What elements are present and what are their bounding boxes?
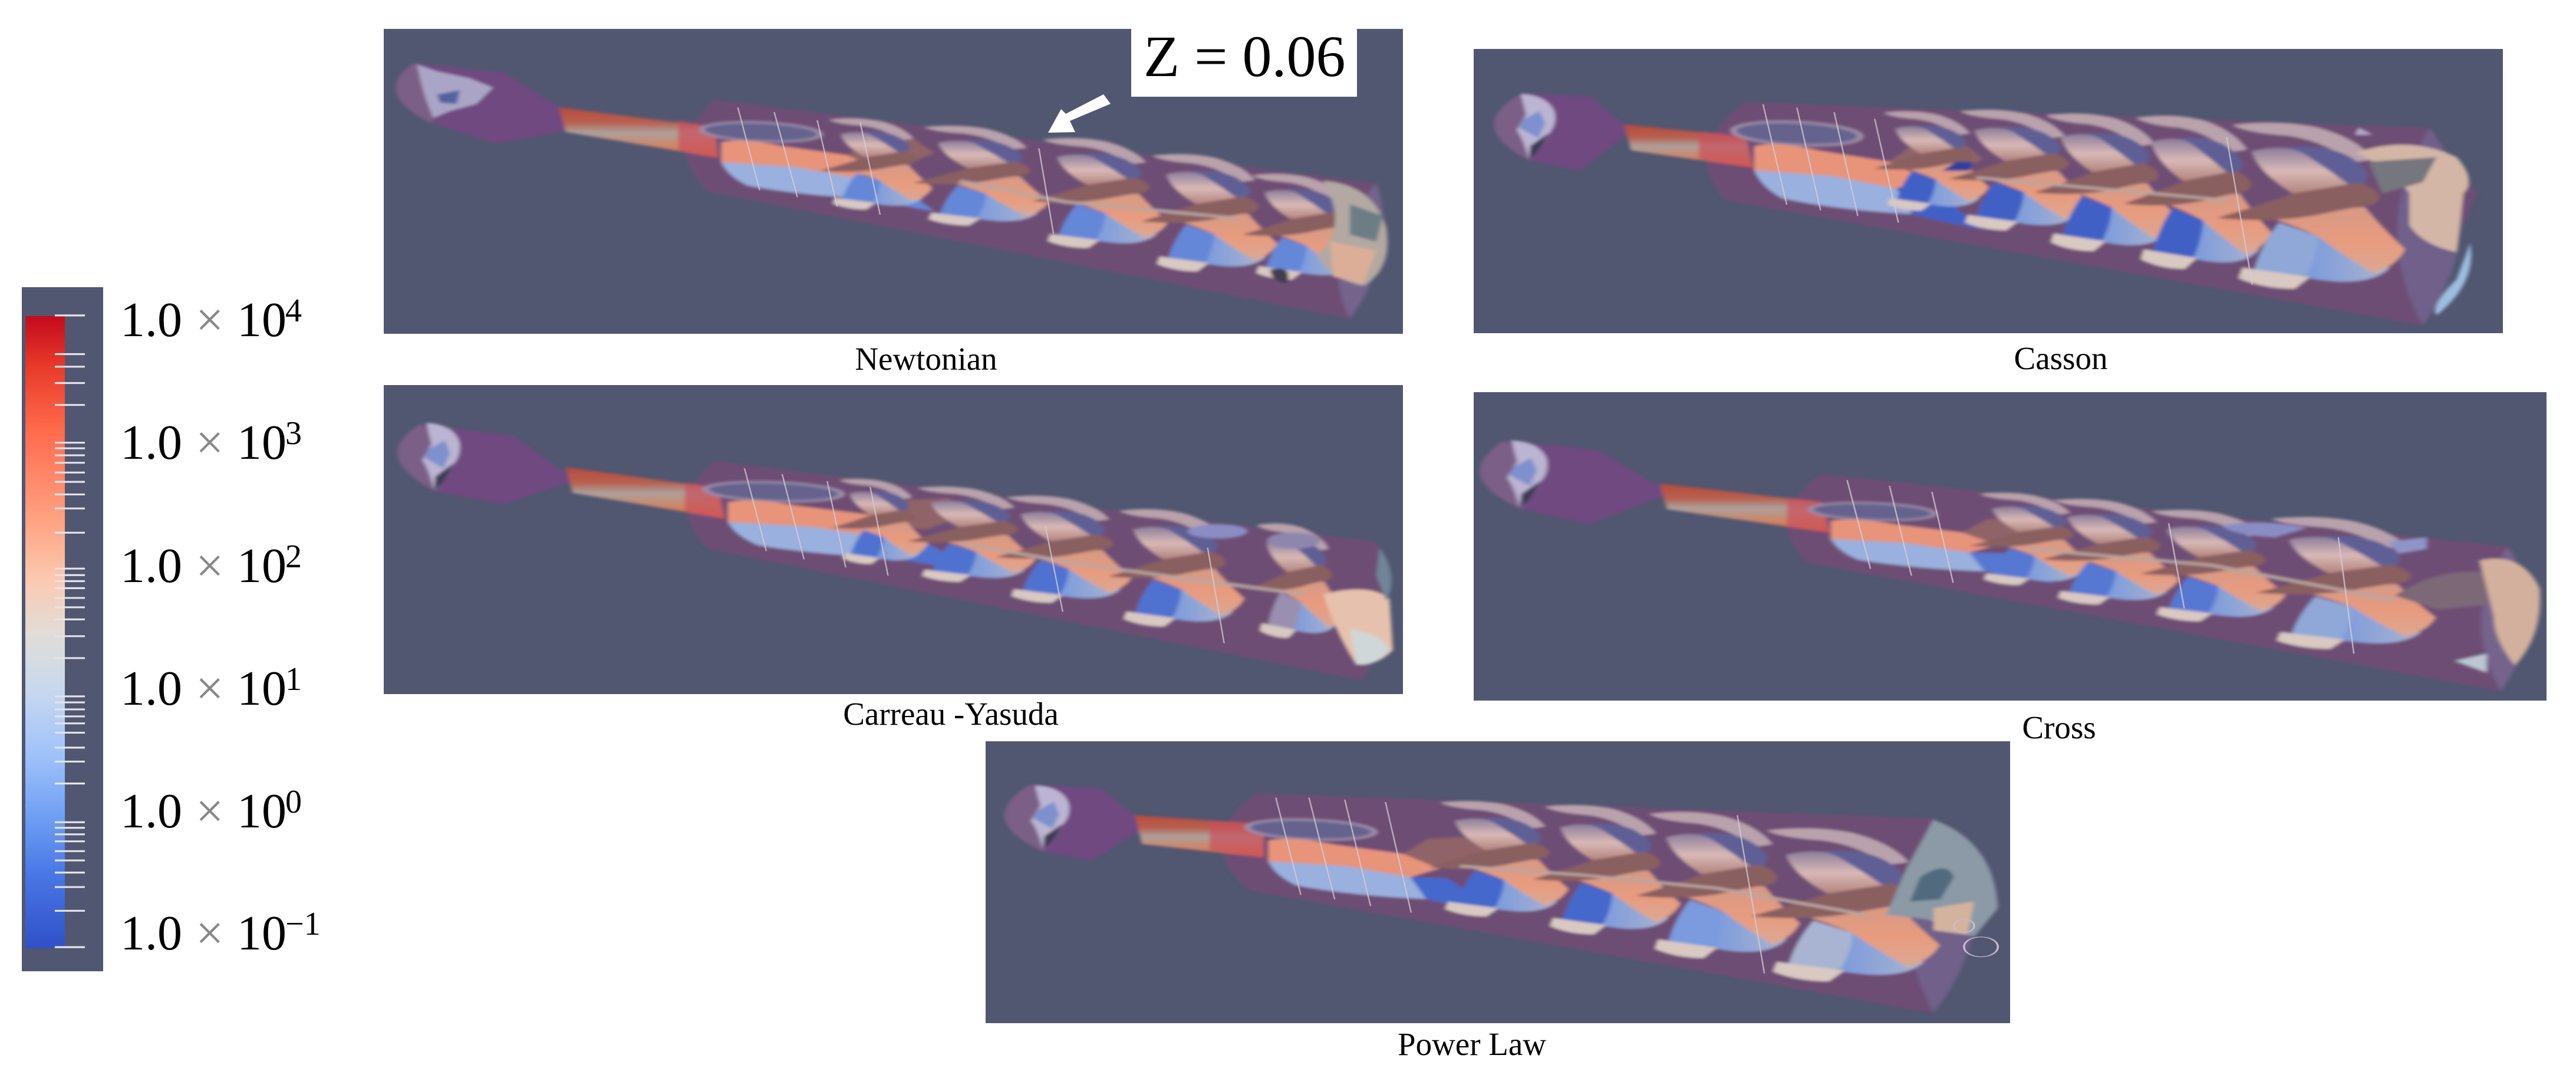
caption Carreau-Yasuda: Carreau -Yasuda	[843, 696, 1059, 732]
arrow to Z = 0.06 surface	[1048, 94, 1111, 133]
panel: Casson	[1474, 49, 2503, 376]
scale label 10^3: 10	[237, 415, 286, 470]
colour bar	[25, 316, 65, 948]
caption Cross: Cross	[2022, 709, 2096, 745]
scale label 10^-1: 10	[237, 906, 286, 961]
tick marks	[55, 315, 85, 947]
callout box Z = 0.06: Z = 0.06	[1144, 24, 1345, 89]
caption Casson: Casson	[2014, 340, 2107, 376]
Newtonian flow rendering	[396, 63, 1388, 318]
Power Law flow rendering	[1004, 784, 1998, 1013]
scale label 10^3: ×	[196, 415, 223, 470]
colour scale legend	[22, 287, 321, 971]
Cross flow rendering	[1480, 441, 2540, 691]
scale label 10^-1: ×	[196, 906, 223, 961]
panel: Carreau-Yasuda	[384, 385, 1403, 732]
scale label 10^3: 1.0	[120, 415, 182, 470]
scale label 10^2: 2	[285, 538, 302, 575]
caption Power Law: Power Law	[1398, 1026, 1546, 1062]
scale label 10^1: 1.0	[120, 661, 182, 716]
scale label 10^1: 10	[237, 661, 286, 716]
streak lines	[738, 107, 1053, 234]
scale label 10^4: 10	[237, 292, 286, 347]
scale label 10^4: ×	[196, 292, 223, 347]
scale label 10^2: 1.0	[120, 538, 182, 593]
streak lines	[745, 468, 1224, 643]
Casson flow rendering	[1494, 93, 2477, 326]
caption Newtonian: Newtonian	[855, 341, 997, 377]
scale label 10^0: 1.0	[120, 784, 182, 839]
scale label 10^1: ×	[196, 661, 223, 716]
panel: Cross	[1474, 392, 2547, 745]
scale label 10^0: 10	[237, 784, 286, 839]
Carreau-Yasuda flow rendering	[397, 423, 1393, 681]
scale label 10^2: ×	[196, 538, 223, 593]
scale label 10^3: 3	[285, 415, 302, 452]
scale label 10^0: 0	[285, 784, 302, 820]
scale label 10^4: 4	[285, 292, 302, 329]
scale label 10^2: 10	[237, 538, 286, 593]
panel: Power Law	[986, 741, 2010, 1062]
scale label 10^-1: 1.0	[120, 906, 182, 961]
streak lines	[1763, 104, 2252, 285]
scale label 10^1: 1	[285, 661, 302, 698]
streak lines	[1847, 480, 2354, 654]
scale label 10^-1: −1	[285, 906, 321, 942]
scale label 10^4: 1.0	[120, 292, 182, 347]
streak lines	[1276, 797, 1764, 974]
panel: Newtonian	[384, 24, 1403, 377]
scale label 10^0: ×	[196, 784, 223, 839]
outlet rings	[1954, 919, 1998, 957]
